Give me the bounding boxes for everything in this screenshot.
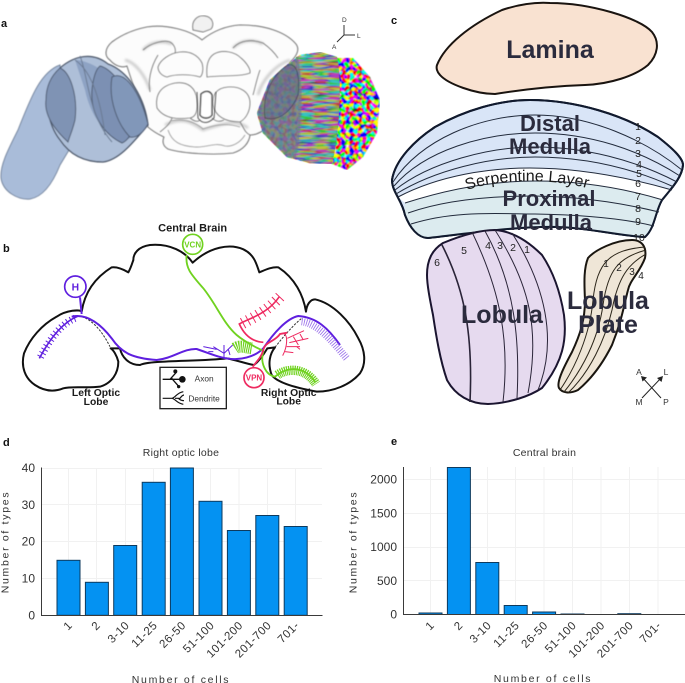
y ticks d xyxy=(22,461,35,622)
lobula xyxy=(427,230,565,404)
lobula plate: Plate xyxy=(578,311,638,339)
lobula: 2 xyxy=(510,242,516,254)
x ticks d: 51-100 xyxy=(181,620,217,656)
middle striped region xyxy=(293,52,340,164)
x ticks e: 701- xyxy=(638,620,664,646)
neuron name labels xyxy=(72,240,262,383)
medulla: 4 xyxy=(636,159,642,171)
medulla: 2 xyxy=(635,135,641,147)
medulla: 1 xyxy=(635,121,641,133)
proximal medulla xyxy=(405,181,663,238)
axes d xyxy=(42,468,322,616)
left optic lobe: blue shapes xyxy=(1,56,148,199)
compass: A xyxy=(636,367,642,377)
region labels: Central Brain xyxy=(158,223,227,235)
lobula plate: 4 xyxy=(638,271,644,282)
panel a: 3D fly brain render xyxy=(1,16,380,199)
x ticks e: 1 xyxy=(424,620,437,633)
legend box: Axon xyxy=(195,374,214,384)
lobula plate: Lobula xyxy=(567,287,650,315)
x ticks d: 2 xyxy=(90,620,103,633)
medulla: Medulla xyxy=(509,134,592,159)
lobula plate xyxy=(558,240,650,393)
lobula: 3 xyxy=(497,240,503,252)
y ticks e: 0 xyxy=(390,608,397,622)
orientation axes: L xyxy=(357,33,361,40)
medulla xyxy=(391,99,684,244)
compass: L xyxy=(664,367,669,377)
lobula: 5 xyxy=(461,245,467,257)
lobula plate: 3 xyxy=(629,267,635,278)
brain outline xyxy=(23,245,364,392)
panel e: bar chart central brain: Number of types xyxy=(348,491,360,593)
lobula: 6 xyxy=(434,257,440,269)
medulla: Medulla xyxy=(510,210,593,235)
lobula: 1 xyxy=(524,244,530,256)
bars e xyxy=(419,468,641,614)
bars d xyxy=(57,468,307,615)
neuron name labels: VPN xyxy=(246,374,262,383)
x ticks d: 701- xyxy=(276,620,302,646)
legend box: Dendrite xyxy=(188,393,220,403)
serpentine layer xyxy=(398,168,672,203)
orientation axes: A xyxy=(332,44,337,51)
medulla: Proximal xyxy=(503,186,595,211)
lobula: Lobula xyxy=(461,301,544,329)
y ticks d: 20 xyxy=(22,534,35,548)
y ticks d: 0 xyxy=(28,608,35,622)
orientation axes: D xyxy=(342,17,347,24)
medulla: 7 xyxy=(635,191,641,203)
neuron VPN: red xyxy=(239,295,308,388)
x ticks d: 201-700 xyxy=(233,620,274,660)
y ticks e xyxy=(370,472,397,622)
x ticks d: 11-25 xyxy=(130,620,160,650)
compass: M xyxy=(635,397,643,407)
medulla: 10 xyxy=(633,232,645,244)
lobula: 4 xyxy=(485,240,491,252)
panel d: bar chart right optic lobe xyxy=(0,437,322,683)
panel c: optic lobe neuropils xyxy=(391,2,684,407)
x ticks d: 101-200 xyxy=(205,620,246,660)
x ticks e xyxy=(424,620,664,660)
x ticks e: 11-25 xyxy=(492,620,522,650)
neuron name labels: VCN xyxy=(184,240,201,249)
chart title d: Right optic lobe xyxy=(143,447,219,459)
brain inner shading xyxy=(125,41,290,130)
lamina: Lamina xyxy=(506,36,595,64)
y ticks e: 500 xyxy=(377,574,397,588)
right optic lobe: coloured neurons xyxy=(257,52,380,170)
medulla: Serpentine Layer xyxy=(465,170,590,189)
panel label c: c xyxy=(391,15,397,27)
x ticks e: 51-100 xyxy=(543,620,579,656)
medulla: 5 xyxy=(636,168,642,180)
lamina xyxy=(437,3,657,94)
region labels: Lobe xyxy=(84,397,109,408)
axes e xyxy=(404,467,685,614)
x ticks e: 3-10 xyxy=(468,620,494,646)
panel label e: e xyxy=(391,436,397,448)
medulla: 6 xyxy=(635,178,641,190)
x ticks e: 2 xyxy=(452,620,466,633)
y ticks d: 40 xyxy=(22,461,35,475)
panel e: bar chart central brain xyxy=(348,436,685,683)
orientation axes xyxy=(332,17,361,51)
grey overlay of inner neuropils xyxy=(257,57,302,159)
y ticks e: 1500 xyxy=(370,506,397,520)
medulla: 9 xyxy=(635,216,641,228)
x ticks e: 101-200 xyxy=(567,620,608,660)
region labels: Right Optic xyxy=(261,388,317,399)
x ticks e: 26-50 xyxy=(520,620,551,651)
compass: P xyxy=(663,397,669,407)
region labels: Lobe xyxy=(276,397,301,408)
panel label d: d xyxy=(3,437,10,449)
x ticks d xyxy=(62,620,302,660)
neuron H: purple xyxy=(39,276,347,360)
y ticks d: 10 xyxy=(22,572,35,586)
medulla: Distal xyxy=(520,111,580,136)
y ticks d: 30 xyxy=(22,498,35,512)
legend box xyxy=(160,367,226,409)
region labels xyxy=(72,223,317,408)
x ticks e: 201-700 xyxy=(595,620,636,660)
panel label b: b xyxy=(3,243,10,255)
lobula plate: 1 xyxy=(603,259,609,270)
medulla: 8 xyxy=(635,203,641,215)
y ticks e: 1000 xyxy=(370,540,397,554)
chart title e: Central brain xyxy=(513,447,576,459)
lobula plate: 2 xyxy=(616,263,622,274)
region labels: Left Optic xyxy=(72,388,120,399)
x ticks d: 26-50 xyxy=(158,620,189,651)
compass xyxy=(635,367,669,407)
y ticks e: 2000 xyxy=(370,472,397,486)
medulla: 3 xyxy=(635,148,641,160)
panel label a: a xyxy=(1,18,8,30)
x ticks d: 3-10 xyxy=(106,620,132,646)
neuron VCN: green xyxy=(183,234,316,384)
neuron name labels: H xyxy=(72,282,79,293)
x ticks d: 1 xyxy=(62,620,75,633)
central brain mesh xyxy=(106,16,298,154)
panel b: neuron schematic xyxy=(3,223,364,409)
central hole xyxy=(200,91,212,118)
